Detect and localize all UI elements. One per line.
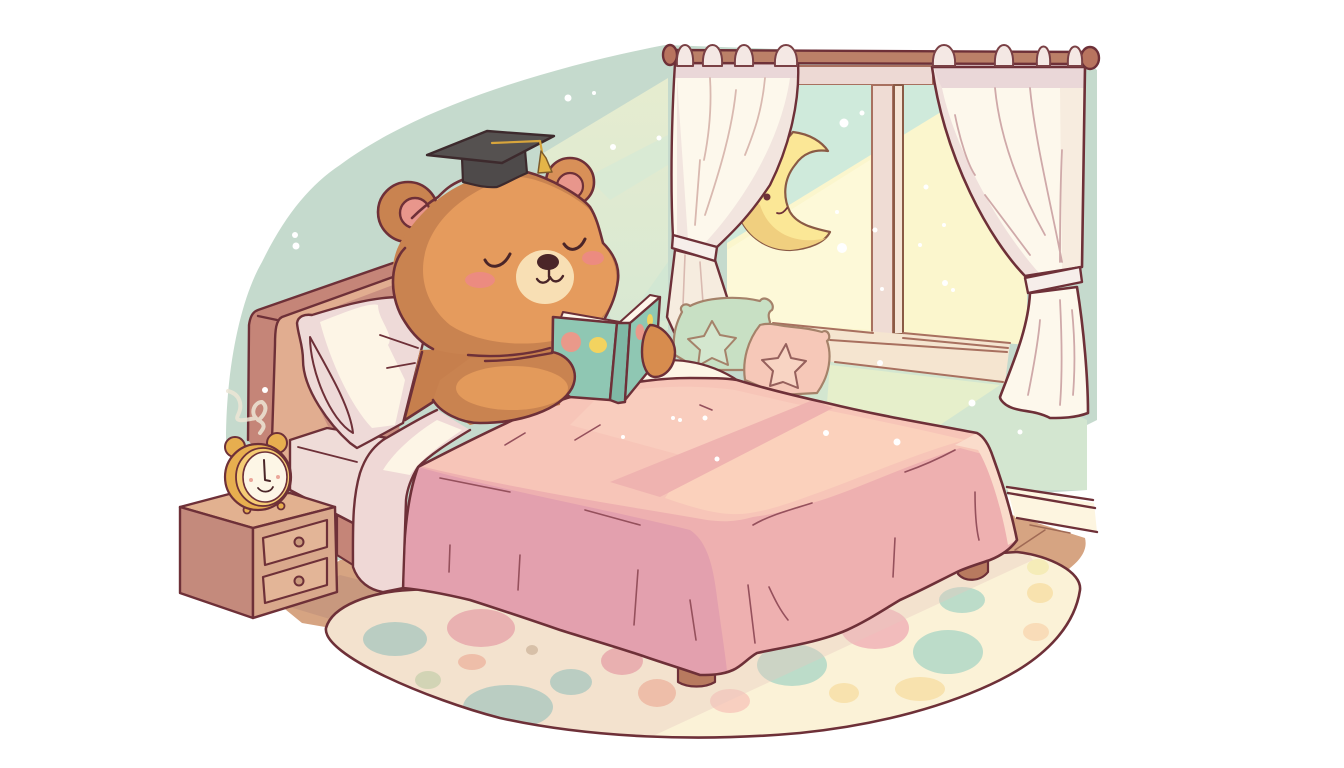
right curtain [932, 63, 1088, 418]
rug [324, 550, 1082, 739]
green star pillow [674, 298, 773, 370]
star pillows [674, 298, 830, 395]
lower curtain panel [667, 250, 727, 345]
muzzle [516, 250, 574, 304]
window mullion [872, 85, 893, 335]
cheeks [465, 251, 604, 288]
nightstand [180, 493, 337, 618]
blanket [403, 378, 1017, 675]
bear arm [433, 348, 575, 423]
bed base [337, 515, 353, 565]
bear ear right [546, 158, 594, 206]
blanket creases [440, 405, 979, 643]
paw on book [642, 325, 675, 377]
curtain rod [663, 45, 1099, 69]
blanket outline [403, 378, 1017, 675]
window [727, 66, 1027, 383]
curtain tie [672, 235, 717, 261]
curtain tie [1025, 267, 1082, 293]
nose and mouth [537, 254, 563, 283]
pink star pillow [744, 324, 830, 395]
blanket left face [403, 467, 727, 675]
headboard [248, 263, 400, 500]
blanket top surface [420, 378, 993, 521]
moon [740, 132, 830, 250]
bed feet [678, 560, 988, 686]
skirting board [1007, 487, 1097, 532]
mattress side [290, 428, 400, 530]
graduation cap [427, 131, 554, 187]
window sill [770, 323, 1010, 383]
wall background [226, 45, 1097, 560]
folded sheet [353, 410, 470, 592]
bear head [392, 172, 618, 355]
lower curtain panel [1000, 287, 1088, 418]
curtain rings [677, 45, 1082, 66]
steam [228, 391, 265, 433]
bear [378, 131, 675, 425]
pillow [297, 297, 423, 448]
floor [280, 487, 1097, 640]
sparkles [262, 91, 1022, 462]
bear body [404, 345, 565, 425]
window glass [727, 85, 1027, 345]
illustration: bear reading in bed [178, 44, 1100, 739]
upper curtain panel [672, 63, 798, 247]
drawers [263, 520, 327, 565]
bear ear left [378, 182, 438, 242]
alarm clock [225, 391, 291, 514]
rug spots [363, 559, 1053, 729]
blanket side base [403, 378, 1017, 675]
closed eyes [485, 239, 585, 266]
bedsheet behind book [640, 360, 740, 390]
book [552, 295, 675, 403]
left curtain [667, 63, 798, 345]
